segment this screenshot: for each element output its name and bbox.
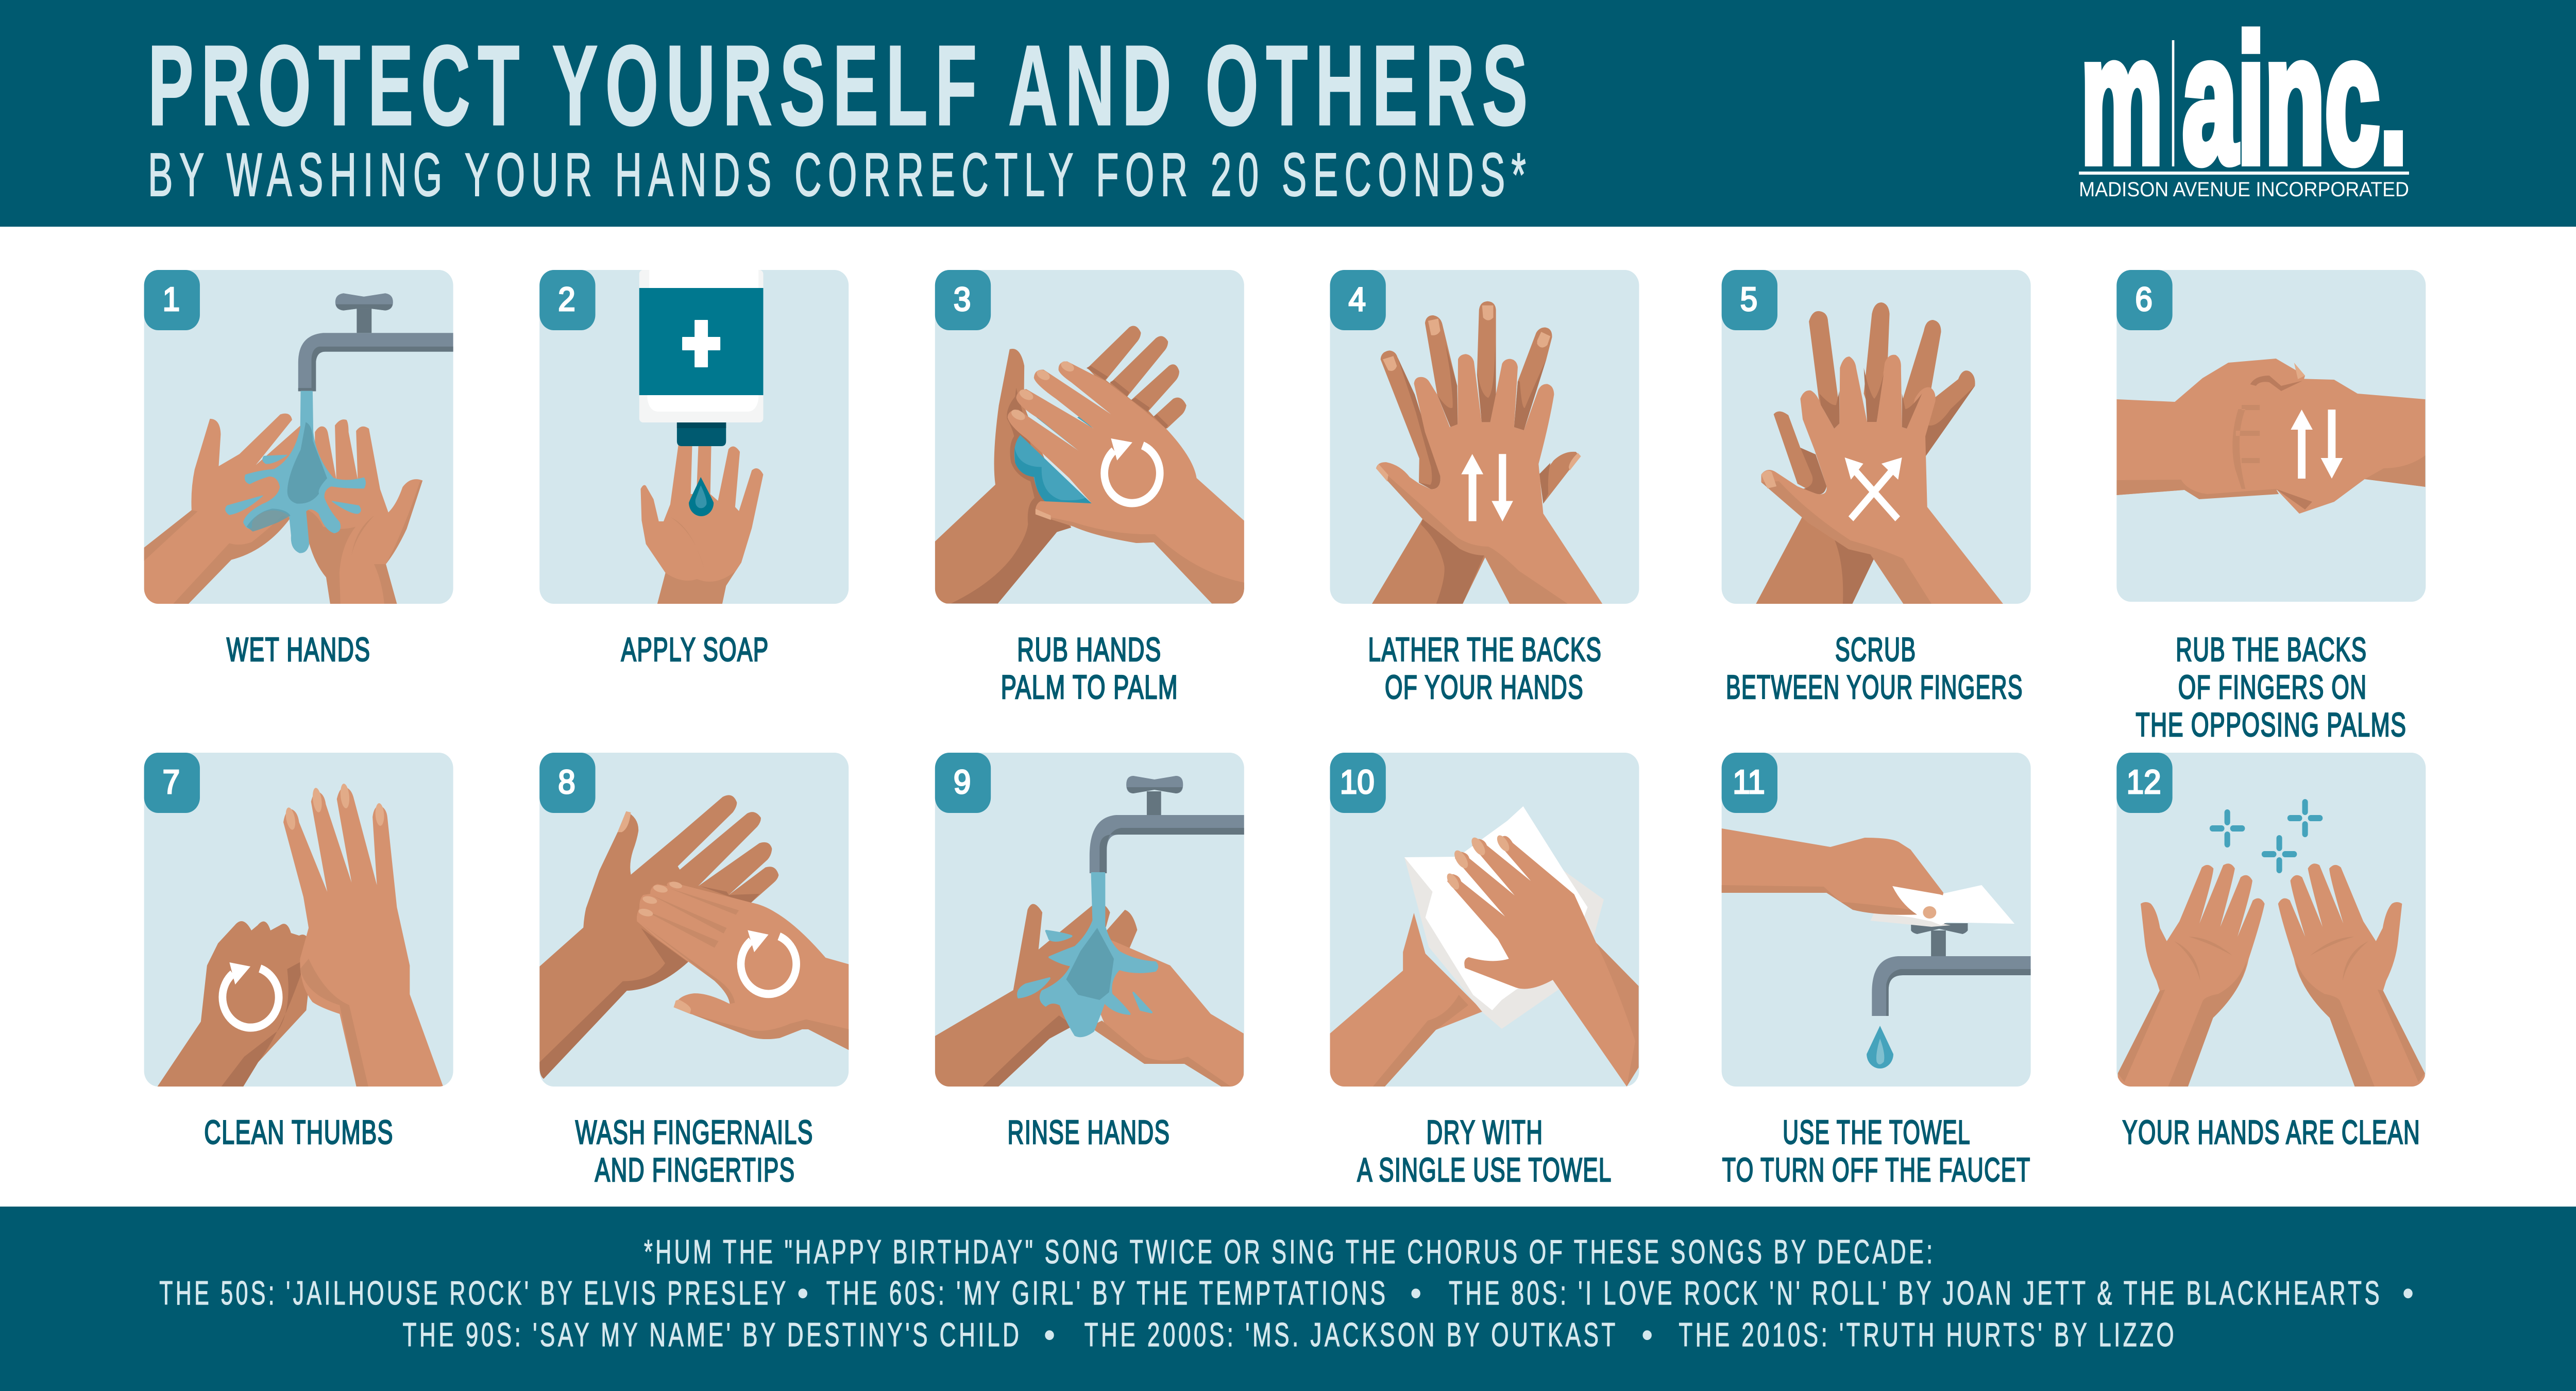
illustration: fingertips in palm xyxy=(539,795,849,1079)
illustration: hands palm to palm xyxy=(935,326,1245,604)
illustration: faucet and hands with water xyxy=(144,293,453,604)
subtitle: BY WASHING YOUR HANDS CORRECTLY FOR 20 SECONDS* xyxy=(148,141,1532,209)
panel: step 8 wash fingernails xyxy=(539,753,849,1087)
panel: step 6 rub backs of fingers xyxy=(2116,270,2426,602)
label: step 3: PALM TO PALM xyxy=(1001,669,1178,706)
label: step 3 xyxy=(1001,631,1178,706)
label: step 3: RUB HANDS xyxy=(1017,631,1162,669)
label: step 9: RINSE HANDS xyxy=(1008,1114,1170,1151)
number badge xyxy=(539,753,596,813)
number badge: 9 xyxy=(954,764,971,801)
footer band xyxy=(0,1207,2576,1391)
label: step 4: LATHER THE BACKS xyxy=(1368,631,1602,669)
number badge xyxy=(1330,270,1386,330)
number badge xyxy=(935,270,991,330)
footer songs line 1: THE 50S: 'JAILHOUSE ROCK' BY ELVIS PRESLEY xyxy=(159,1275,789,1312)
footer songs line 1: • xyxy=(2403,1275,2417,1312)
label: step 2: APPLY SOAP xyxy=(621,631,769,669)
panel: step 10 dry with towel xyxy=(1330,753,1639,1087)
label: step 11: USE THE TOWEL xyxy=(1783,1114,1971,1151)
label: step 10 xyxy=(1357,1114,1612,1189)
footer songs line 1: • xyxy=(798,1275,812,1312)
sparkles xyxy=(2210,799,2323,873)
footer intro line: *HUM THE "HAPPY BIRTHDAY" SONG TWICE OR SING THE CHORUS OF THESE SONGS BY DECADE: xyxy=(644,1233,1935,1271)
footer songs line 1: THE 60S: 'MY GIRL' BY THE TEMPTATIONS xyxy=(826,1275,1388,1312)
number badge: 6 xyxy=(2135,281,2153,318)
panel: step 11 turn off faucet with towel xyxy=(1722,753,2031,1087)
number badge: 11 xyxy=(1733,764,1765,801)
number badge: 1 xyxy=(163,281,180,318)
number badge: 4 xyxy=(1349,281,1366,318)
label: step 10: A SINGLE USE TOWEL xyxy=(1357,1151,1612,1189)
number badge xyxy=(1330,753,1386,813)
number badge: 10 xyxy=(1340,764,1375,801)
right hand xyxy=(2278,863,2425,1087)
number badge xyxy=(935,753,991,813)
footer songs line 2: • xyxy=(1044,1316,1059,1354)
header band xyxy=(0,0,2576,227)
logo: ainc. xyxy=(2182,0,2407,200)
number badge: 12 xyxy=(2127,764,2161,801)
number badge xyxy=(539,270,596,330)
panel: step 1 wet hands xyxy=(144,270,453,604)
illustration: clean hands xyxy=(2118,863,2425,1087)
label: step 6: OF FINGERS ON xyxy=(2178,669,2367,706)
panel: step 12 clean hands xyxy=(2116,753,2426,1087)
label: step 4 xyxy=(1368,631,1602,706)
label: step 5: BETWEEN YOUR FINGERS xyxy=(1726,669,2023,706)
panel: step 9 rinse hands xyxy=(935,753,1244,1087)
illustration: interlaced fingers xyxy=(1756,302,2003,604)
rotation arrow xyxy=(741,930,796,994)
label: step 6 xyxy=(2136,631,2406,744)
illustration: hands drying with towel xyxy=(1330,806,1639,1087)
crossing arrows xyxy=(1845,457,1902,519)
label: step 11 xyxy=(1722,1114,2031,1189)
number badge: 2 xyxy=(558,281,575,318)
footer songs line 2: THE 90S: 'SAY MY NAME' BY DESTINY'S CHILD xyxy=(402,1316,1022,1354)
footer songs line 2 xyxy=(402,1316,2177,1354)
label: step 11: TO TURN OFF THE FAUCET xyxy=(1722,1151,2031,1189)
number badge xyxy=(1722,270,1777,330)
logo: m xyxy=(2081,0,2163,200)
label: step 1: WET HANDS xyxy=(227,631,370,669)
label: step 6: THE OPPOSING PALMS xyxy=(2136,706,2406,744)
logo xyxy=(2079,0,2409,201)
label: step 12: YOUR HANDS ARE CLEAN xyxy=(2122,1114,2420,1151)
panel: step 3 rub palm to palm xyxy=(935,270,1245,604)
footer songs line 1: • xyxy=(1411,1275,1425,1312)
number badge: 3 xyxy=(954,281,971,318)
logo: MADISON AVENUE INCORPORATED xyxy=(2079,178,2409,201)
footer songs line 2: THE 2010S: 'TRUTH HURTS' BY LIZZO xyxy=(1679,1316,2177,1354)
number badge: 5 xyxy=(1740,281,1757,318)
up and down arrows xyxy=(1461,454,1513,521)
illustration: faucet rinsing hands xyxy=(935,776,1244,1087)
number badge xyxy=(2116,753,2173,813)
number badge xyxy=(1722,753,1777,813)
label: step 8: WASH FINGERNAILS xyxy=(575,1114,814,1151)
illustration: hand clasping thumb xyxy=(158,783,443,1087)
illustration: towel on faucet and water drop xyxy=(1722,828,2031,1068)
rotation arrow xyxy=(1105,438,1160,503)
footer songs line 2: • xyxy=(1642,1316,1656,1354)
illustration: hands overlapping, backs xyxy=(1372,301,1602,604)
number badge xyxy=(144,753,200,813)
number badge: 7 xyxy=(163,764,180,801)
panel: step 2 apply soap xyxy=(539,270,849,604)
label: step 8: AND FINGERTIPS xyxy=(595,1151,795,1189)
label: step 6: RUB THE BACKS xyxy=(2176,631,2367,669)
number badge xyxy=(144,270,200,330)
label: step 4: OF YOUR HANDS xyxy=(1385,669,1584,706)
up and down arrows xyxy=(2291,410,2343,479)
panel: step 4 lather backs xyxy=(1330,270,1639,604)
label: step 7: CLEAN THUMBS xyxy=(204,1114,394,1151)
label: step 10: DRY WITH xyxy=(1427,1114,1543,1151)
rotation arrow xyxy=(223,962,279,1028)
panel: step 7 clean thumbs xyxy=(144,753,453,1087)
footer songs line 1 xyxy=(159,1275,2417,1312)
label: step 8 xyxy=(575,1114,814,1189)
label: step 5 xyxy=(1726,631,2023,706)
left hand xyxy=(2118,863,2265,1087)
label: step 5: SCRUB xyxy=(1835,631,1916,669)
number badge: 8 xyxy=(558,764,575,801)
illustration: soap bottle and hand xyxy=(639,270,763,604)
footer songs line 2: THE 2000S: 'MS. JACKSON BY OUTKAST xyxy=(1084,1316,1618,1354)
number badge xyxy=(2116,270,2173,330)
title: PROTECT YOURSELF AND OTHERS xyxy=(148,22,1535,149)
panel: step 5 scrub between fingers xyxy=(1722,270,2031,604)
illustration: interlocked fists xyxy=(2116,359,2425,514)
